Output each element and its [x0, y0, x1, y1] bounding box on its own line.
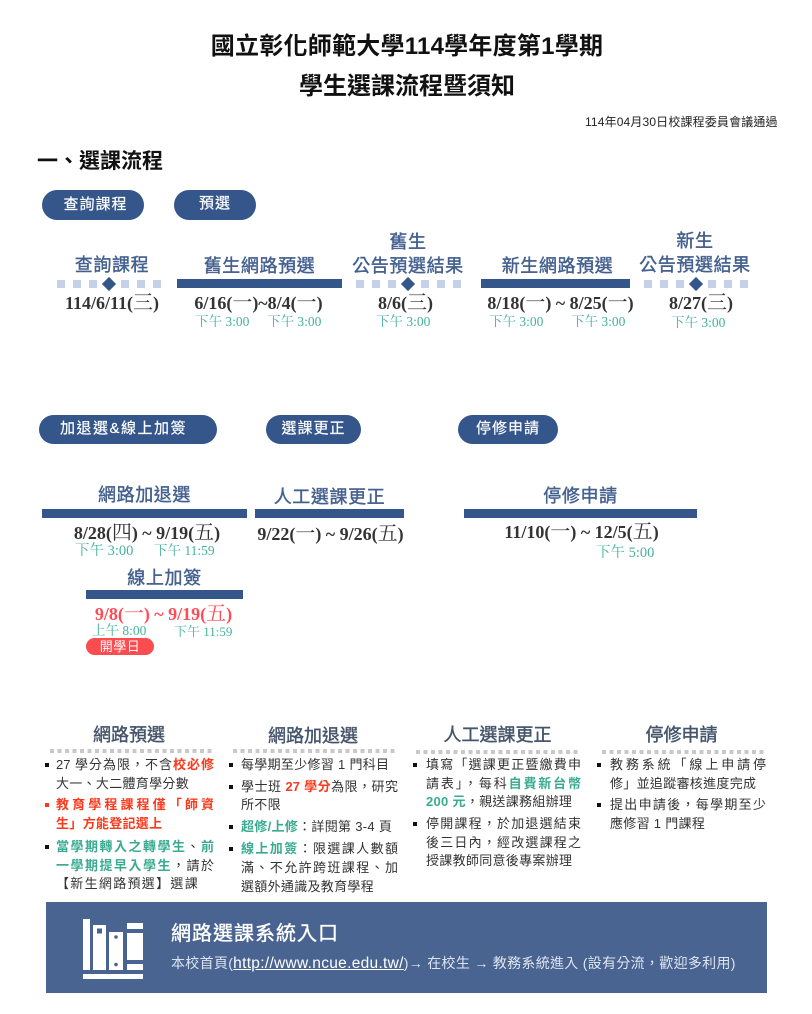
heading: 新生網路預選 — [502, 256, 613, 276]
heading: 網路加退選 — [268, 726, 358, 746]
bullet 2: 生」方能登記選上 — [56, 816, 162, 831]
banner text: 本校首頁(http://www.ncue.edu.tw/)→ 在校生 → 教務系統進入 (設有分流，歡迎多利用) — [171, 955, 736, 972]
divider — [602, 750, 767, 754]
time: 下午 3:00 — [671, 315, 725, 330]
timeline: 網路加退選 — [42, 485, 247, 559]
heading: 網路加退選 — [98, 485, 191, 505]
time end: 下午 3:00 — [267, 314, 321, 329]
bullet 2: 授課教師同意後專案辦理 — [426, 853, 572, 868]
panel: 網路加退選 notes — [229, 726, 398, 894]
divider — [416, 750, 581, 754]
panel: 網路預選 notes — [45, 725, 214, 891]
heading line 2: 公告預選結果 — [352, 256, 464, 276]
bullet 1: 200 元，親送課務組辦理 — [426, 794, 572, 809]
heading: 新生 — [676, 231, 714, 251]
pill: 加退選&線上加簽: 加退選&線上加簽 — [60, 420, 187, 437]
bar — [464, 509, 697, 518]
bullet 2: 應修習 1 門課程 — [610, 816, 705, 831]
timeline: 線上加簽 — [86, 568, 243, 655]
pill: 預選 — [174, 190, 256, 220]
heading: 線上加簽 — [127, 568, 202, 588]
icon: books — [83, 919, 143, 979]
heading: 停修申請 — [543, 486, 618, 506]
bullet 4: 線上加簽：限選課人數額 — [241, 841, 398, 856]
badge: 開學日 — [86, 638, 154, 655]
bullet 2: 學士班 27 學分為限，研究 — [241, 779, 398, 794]
dotted marker — [356, 277, 461, 291]
bullet 2: 提出申請後，每學期至少 — [610, 797, 766, 812]
time: 下午 5:00 — [596, 545, 654, 561]
bullet 4: 選額外通識及教育學程 — [241, 879, 374, 894]
pill: 查詢課程: 查詢課程 — [63, 196, 128, 213]
title: 國立彰化師範大學114學年度第1學期 — [211, 33, 603, 60]
pill: 選課更正 — [266, 415, 361, 444]
date: 11/10(一) ~ 12/5(五) — [504, 521, 659, 543]
date: 8/27(三) — [669, 292, 733, 314]
date: 8/6(三) — [378, 292, 433, 314]
section heading: 一、選課流程 — [37, 150, 163, 173]
time end: 下午 11:59 — [154, 543, 215, 558]
bullet 1 — [597, 757, 766, 791]
bar — [42, 509, 247, 518]
bullet 2: 後三日內，經改選課程之 — [426, 835, 581, 850]
divider — [233, 749, 398, 753]
time start: 下午 3:00 — [195, 314, 249, 329]
time start: 下午 3:00 — [75, 543, 133, 559]
time start: 下午 3:00 — [489, 314, 543, 329]
timeline: 舊生網路預選 — [177, 256, 342, 329]
date: 9/8(一) ~ 9/19(五) — [95, 603, 232, 625]
bullet 1: 大一、大二體育學分數 — [56, 776, 189, 791]
subtitle: 學生選課流程暨須知 — [299, 73, 515, 100]
approval note: 114年04月30日校課程委員會議通過 — [585, 115, 778, 129]
bullet 2: 教育學程課程僅「師資 — [56, 797, 214, 812]
bar — [255, 509, 404, 518]
bullet 4 — [229, 841, 398, 894]
panel: 停修申請 notes — [597, 725, 766, 831]
pill: 預選: 預選 — [199, 195, 231, 212]
badge: 開學日: 開學日 — [100, 639, 140, 654]
pill: 停修申請: 停修申請 — [476, 420, 540, 437]
time end: 下午 3:00 — [571, 314, 625, 329]
heading: 查詢課程 — [75, 255, 149, 275]
heading: 人工選課更正 — [274, 487, 385, 507]
date: 6/16(一)~8/4(一) — [194, 292, 323, 314]
pill: 加退選&線上加簽 — [39, 415, 217, 444]
heading: 網路預選 — [93, 725, 165, 745]
bullet 1 — [413, 757, 581, 809]
bullet 1: 請表」，每科自費新台幣 — [426, 776, 581, 791]
bullet 1: 修」並追蹤審核進度完成 — [610, 776, 756, 791]
bullet 1 — [45, 757, 214, 791]
date: 8/28(四) ~ 9/19(五) — [74, 522, 220, 544]
timeline: 停修申請 — [464, 486, 697, 561]
bullet 2 — [45, 797, 214, 831]
bullet 3: 一學期提早入學生，請於 — [56, 858, 214, 873]
date: 9/22(一) ~ 9/26(五) — [257, 523, 404, 545]
banner title: 網路選課系統入口 — [171, 923, 339, 945]
time end: 下午 11:59 — [174, 624, 232, 639]
bullet 1: 27 學分為限，不含校必修 — [56, 757, 214, 772]
heading line 2: 公告預選結果 — [639, 255, 751, 275]
bullet 1: 教務系統「線上申請停 — [610, 757, 766, 772]
time: 下午 3:00 — [376, 314, 430, 329]
bullet 3: 當學期轉入之轉學生、前 — [56, 839, 214, 854]
timeline: 新生公告預選結果 — [639, 231, 751, 330]
bullet 2 — [413, 816, 581, 868]
pill: 選課更正: 選課更正 — [281, 420, 346, 437]
bar — [177, 279, 342, 288]
date: 8/18(一) ~ 8/25(一) — [487, 292, 634, 314]
bullet 2: 停開課程，於加退選結束 — [426, 816, 581, 831]
bullet 3: 【新生網路預選】選課 — [56, 876, 199, 891]
pill: 停修申請 — [458, 415, 558, 444]
pill: 查詢課程 — [42, 190, 144, 220]
dotted marker — [57, 277, 161, 291]
bullet 1: 填寫「選課更正暨繳費申 — [426, 757, 581, 772]
dotted marker — [644, 277, 748, 291]
time start: 上午 8:00 — [92, 623, 146, 638]
bullet 2 — [597, 797, 766, 831]
bullet 1: 每學期至少修習 1 門科目 — [241, 757, 389, 772]
banner: 網路選課系統入口 — [46, 902, 767, 993]
bullet 4: 滿、不允許跨班課程、加 — [241, 860, 398, 875]
timeline: 新生網路預選 — [481, 256, 634, 329]
timeline: 查詢課程 — [57, 255, 161, 314]
divider — [50, 749, 215, 753]
bullet 3: 超修/上修：詳閱第 3-4 頁 — [241, 819, 392, 834]
date: 114/6/11(三) — [65, 292, 159, 314]
heading: 舊生網路預選 — [204, 256, 315, 276]
bar — [481, 279, 630, 288]
bullet 2: 所不限 — [241, 797, 281, 812]
bar — [86, 590, 243, 599]
heading: 舊生 — [389, 232, 427, 252]
heading: 停修申請 — [646, 725, 718, 745]
bullet 3 — [45, 839, 214, 891]
timeline: 人工選課更正 — [255, 487, 404, 545]
heading: 人工選課更正 — [444, 725, 552, 745]
bullet 2 — [229, 779, 398, 812]
panel: 人工選課更正 notes — [413, 725, 581, 868]
timeline: 舊生公告預選結果 — [352, 232, 464, 329]
